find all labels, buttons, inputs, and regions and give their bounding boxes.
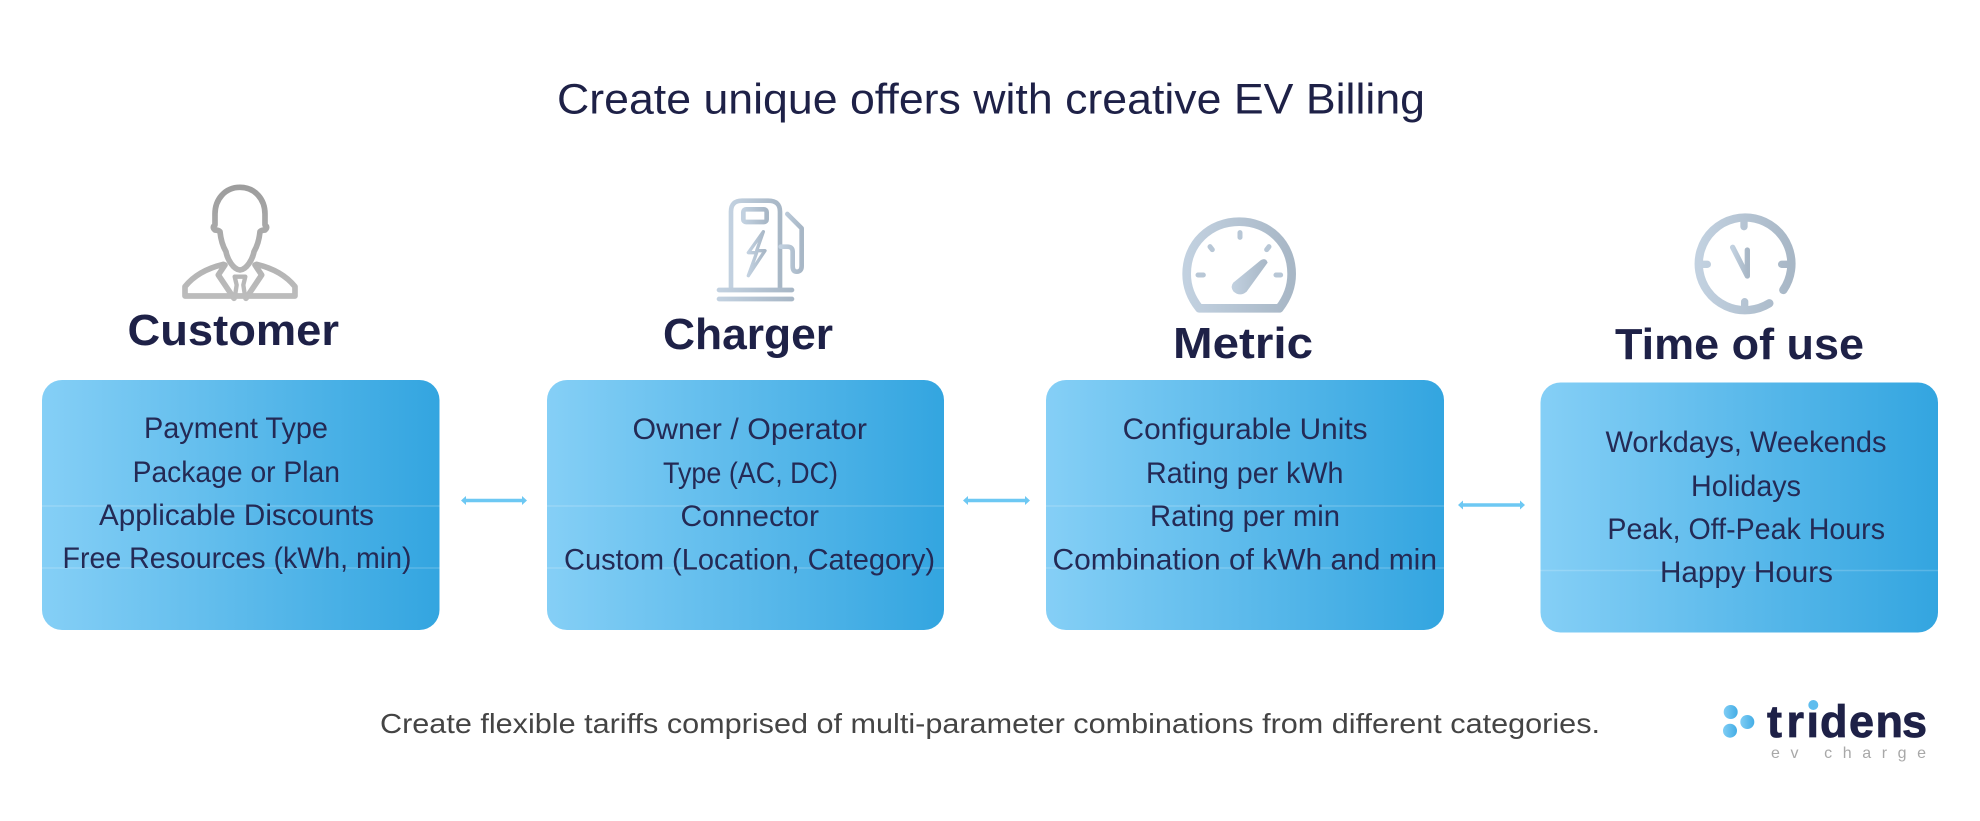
arrow: metric to time of use xyxy=(1458,500,1525,510)
heading: time of use: Time of use xyxy=(1615,320,1864,369)
panel: charger: Type (AC, DC) xyxy=(663,457,838,490)
panel: metric: Rating per kWh xyxy=(1146,457,1344,490)
panel: charger: Custom (Location, Category) xyxy=(564,544,935,576)
panel: metric xyxy=(1046,380,1444,630)
icon: charger xyxy=(719,201,802,299)
panel: customer: Payment Type xyxy=(144,412,328,445)
icon: time of use xyxy=(1699,218,1791,310)
panel: time of use: Workdays, Weekends xyxy=(1606,426,1886,459)
logo: tridens ev charge: ev charge xyxy=(1771,745,1926,762)
panel: charger: Owner / Operator xyxy=(632,413,867,446)
icon: customer xyxy=(185,187,295,298)
panel: time of use: Peak, Off-Peak Hours xyxy=(1607,513,1885,546)
panel: time of use: Holidays xyxy=(1691,470,1801,503)
heading: charger: Charger xyxy=(663,310,833,359)
logo: tridens ev charge xyxy=(1723,696,1927,762)
arrow: charger to metric xyxy=(963,496,1030,505)
panel: time of use: Happy Hours xyxy=(1660,556,1833,589)
panel: metric: Combination of kWh and min xyxy=(1052,544,1437,576)
panel: time of use xyxy=(1540,382,1938,632)
heading: metric: Metric xyxy=(1173,319,1313,368)
heading: customer: Customer xyxy=(128,306,339,355)
panel: customer: Applicable Discounts xyxy=(99,499,374,532)
panel: metric: Configurable Units xyxy=(1123,413,1368,446)
panel: customer: Free Resources (kWh, min) xyxy=(62,542,412,575)
panel: charger xyxy=(547,380,944,630)
icon: metric xyxy=(1187,222,1292,308)
logo: tridens ev charge: tridens xyxy=(1767,696,1927,747)
panel: customer: Package or Plan xyxy=(133,456,340,489)
panel: metric: Rating per min xyxy=(1150,500,1340,533)
panel: charger: Connector xyxy=(680,500,819,533)
title: Create unique offers with creative EV Billing xyxy=(557,76,1425,124)
panel: customer xyxy=(42,380,440,630)
footer note: Create flexible tariffs comprised of multi-parameter combinations from different categories. xyxy=(380,708,1600,739)
arrow: customer to charger xyxy=(461,496,527,505)
